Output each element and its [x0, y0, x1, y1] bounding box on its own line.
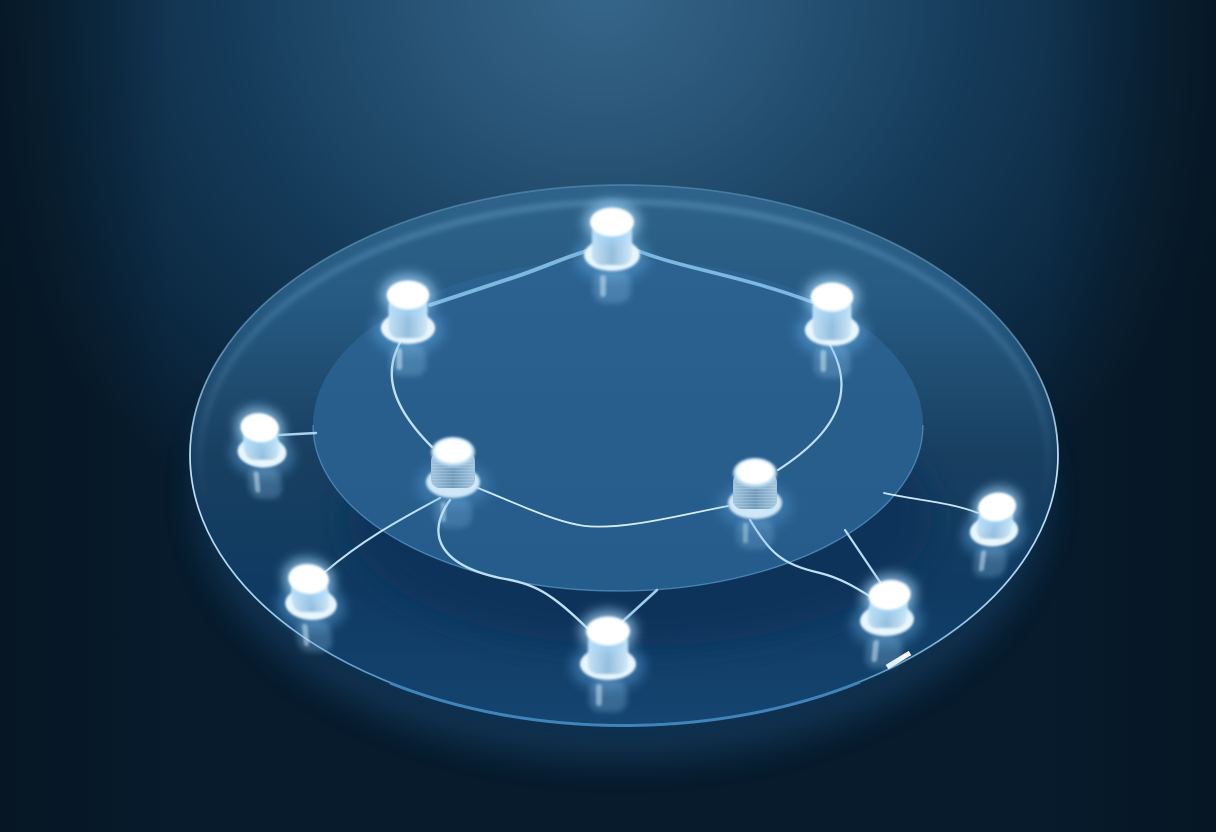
rim highlight [887, 653, 910, 667]
node: inner left [416, 437, 490, 528]
node: inner right [718, 458, 792, 549]
lower disc reflection [194, 227, 1050, 763]
node: top [575, 201, 649, 303]
connection wires [279, 250, 978, 628]
node: bottom [571, 610, 645, 712]
node: far left [226, 407, 299, 499]
node: lower right [847, 574, 927, 668]
node: lower left [273, 558, 350, 652]
outer glass disc [190, 185, 1058, 726]
inner glass disc [313, 259, 923, 591]
node: upper left [372, 274, 444, 376]
node: far right [956, 487, 1031, 577]
node: upper right [796, 276, 868, 378]
inner disc shadow [348, 390, 932, 646]
